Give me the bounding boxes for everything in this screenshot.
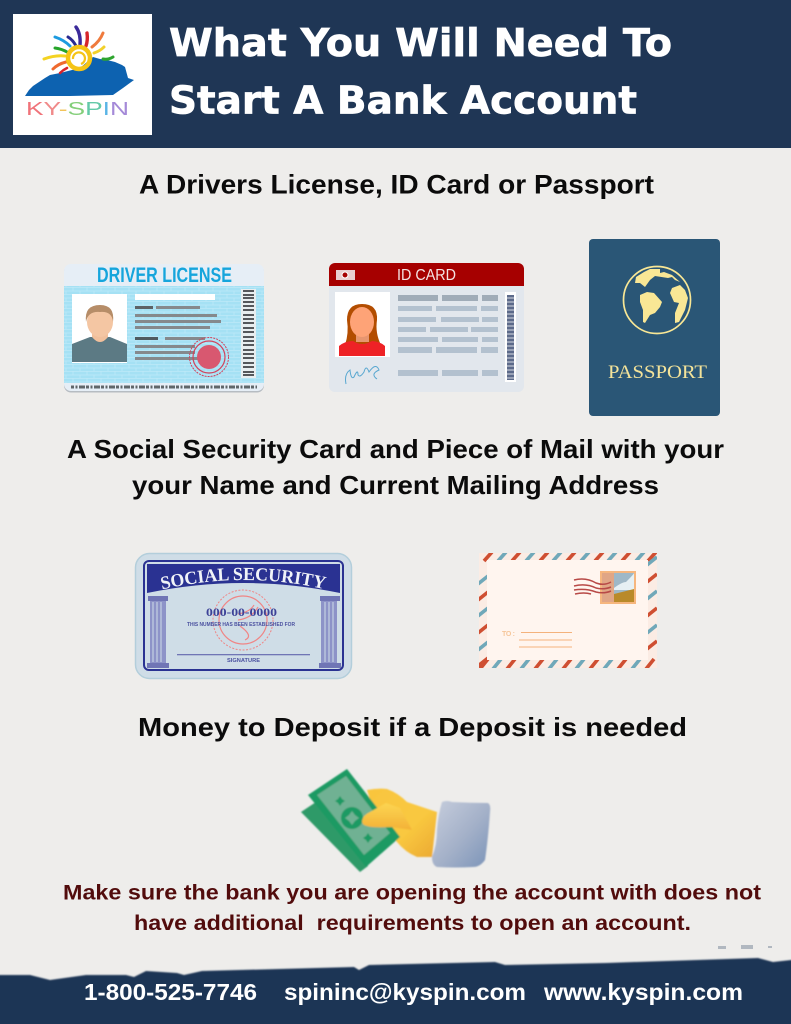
title: Start A Bank Account bbox=[169, 78, 637, 124]
contact details: spininc@kyspin.com bbox=[284, 979, 526, 1005]
icon: envelope bbox=[478, 552, 657, 669]
note: bank requirements: Make sure the bank you are opening the account with does not bbox=[63, 880, 761, 904]
contact details: 1-800-525-7746 bbox=[84, 979, 257, 1005]
footer band bbox=[0, 945, 791, 1024]
heading: social security and mail: your Name and Current Mailing Address bbox=[132, 470, 659, 500]
contact details bbox=[84, 979, 743, 1005]
note: bank requirements bbox=[63, 880, 761, 935]
icon: social security card: SOCIAL SECURITY bbox=[161, 568, 327, 589]
header band bbox=[0, 0, 791, 148]
icon: envelope: TO : bbox=[502, 631, 515, 638]
icon: social security card: SIGNATURE bbox=[227, 658, 260, 664]
icon: social security card: THIS NUMBER HAS BEEN ESTABLISHED FOR bbox=[187, 622, 295, 628]
icon: passport: PASSPORT bbox=[608, 362, 707, 383]
title: What You Will Need To bbox=[169, 21, 672, 66]
title bbox=[169, 21, 672, 124]
icon: hand holding money bbox=[301, 769, 490, 872]
contact details: www.kyspin.com bbox=[543, 979, 743, 1005]
icon: ID card bbox=[329, 263, 524, 392]
heading: money: Money to Deposit if a Deposit is needed bbox=[138, 712, 687, 742]
logo: KY-SPIN: K Y-S P IN bbox=[26, 98, 129, 119]
heading: social security and mail bbox=[67, 434, 724, 500]
icon: social security card: 000-00-0000 bbox=[206, 605, 277, 619]
icon: social security card bbox=[134, 552, 352, 680]
logo: KY-SPIN bbox=[13, 14, 152, 135]
icon: driver license bbox=[64, 264, 264, 392]
icon: driver license: DRIVER LICENSE bbox=[97, 264, 232, 287]
icon: passport bbox=[589, 239, 720, 416]
note: bank requirements: have additional requirements to open an account. bbox=[134, 911, 691, 935]
heading: social security and mail: A Social Security Card and Piece of Mail with your bbox=[67, 434, 724, 464]
icon: ID card: ID CARD bbox=[397, 267, 456, 284]
heading: identification: A Drivers License, ID Card or Passport bbox=[139, 170, 654, 200]
